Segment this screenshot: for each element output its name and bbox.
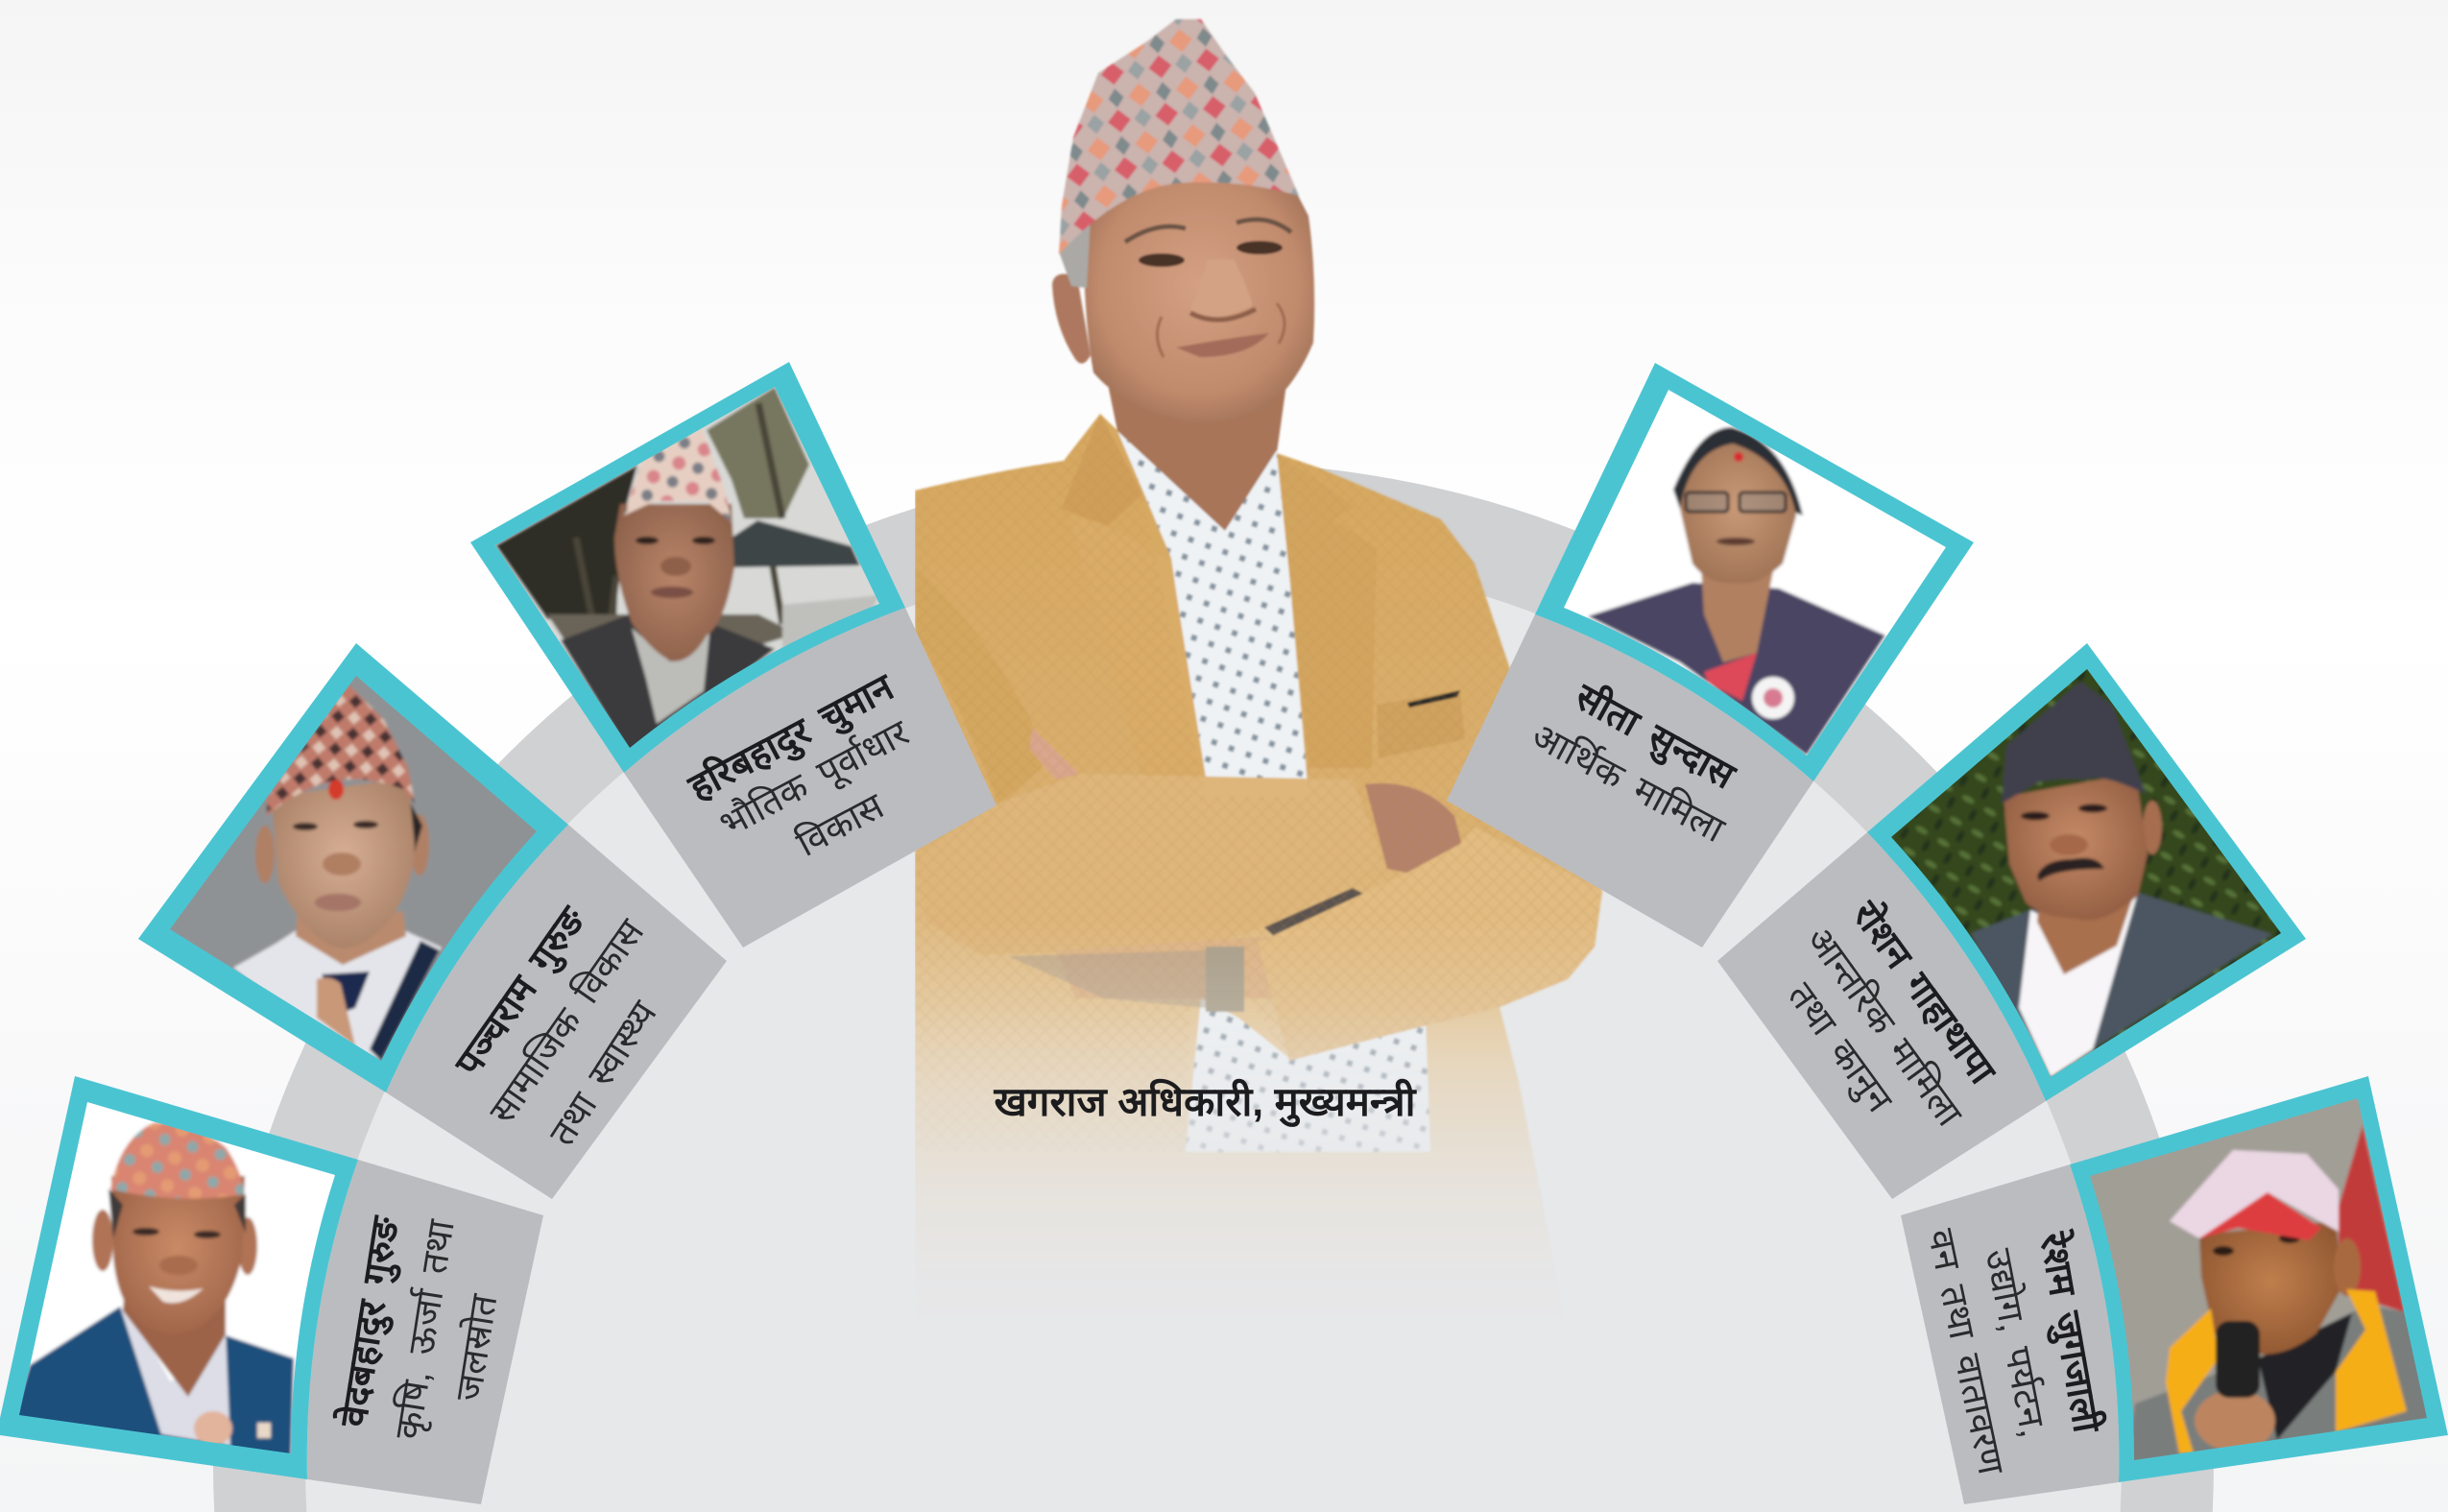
hair [1673,427,1803,516]
portrait 6: रेशम जुगजाली [2074,1085,2443,1469]
forearm under arm [1059,938,1271,998]
name: रोशन गाहाथापा [1843,893,2005,1092]
left trees [495,465,637,619]
mouth [651,587,693,598]
portfolio line 1: सामाजिक विकास [481,911,653,1131]
eyes [2213,1246,2234,1256]
panel: सीता सुन्दास label [1447,614,1813,948]
shirt [2019,893,2138,1077]
right hand [1365,783,1463,876]
neck [2037,888,2136,974]
ear [2334,1238,2361,1296]
watch strap gap [1264,888,1365,939]
jacket [2126,1306,2434,1469]
portfolio line 2: जलस्रोत [447,1290,506,1404]
portfolio line 1: कृषि, ऊर्जा तथा [386,1216,465,1443]
text: रोशन गाहाथापा [1778,893,2005,1135]
portfolio line 1: भौतिक पूर्वाधार [712,710,918,848]
nose [159,1256,198,1275]
tika [2201,1192,2321,1240]
text: सीता सुन्दास [1524,674,1743,852]
photo frame 6 [2070,1076,2448,1482]
panel: रेशम जुगजाली label [1901,1164,2119,1504]
caption: chief minister: खगराज अधिकारी, मुख्यमन्त्री [993,1078,1418,1127]
smile creases [1157,303,1284,357]
shirt [632,625,710,724]
ears [92,1210,113,1271]
eyes [293,823,318,830]
lower shirt [1186,998,1430,1152]
portrait 1: वेदबहादुर गुरुङ [0,1056,384,1488]
eyes [1139,253,1185,267]
mouth [1716,538,1755,545]
neck [1701,566,1774,662]
tie [322,972,370,1013]
garland left [2166,1308,2219,1453]
jacket [10,1307,294,1469]
ears [255,826,275,883]
left collar [1062,414,1142,526]
eyes [132,1228,159,1236]
badge [1752,677,1794,719]
eyebrows [1125,227,1186,242]
cap [2170,1150,2339,1238]
suit [1971,893,2272,1066]
hands [317,977,355,1046]
nose [660,557,691,576]
suit [561,614,775,754]
hand [2195,1390,2275,1452]
trunks [576,403,782,624]
face [272,778,415,948]
face [2199,1221,2342,1355]
portrait 3: हरिबहादुर चुमान [480,374,893,758]
blouse [1704,653,1757,701]
name: पञ्चराम गुरुङ [447,899,597,1086]
portfolio line 1: आन्तरिक मामिला [1798,919,1971,1135]
photo frame 4 [1535,363,1974,781]
sleeve hand tip [1029,728,1079,780]
face [1680,444,1796,584]
portrait 4: सीता सुन्दास [1555,374,1958,768]
jacket weave texture [915,414,1602,1152]
outer grey arc band [213,463,2214,1512]
portfolio line 2: वन तथा वातावरण [1919,1226,2011,1478]
right tree [707,387,809,518]
bindi [1734,452,1743,462]
garland right [2336,1289,2407,1432]
strap [370,941,440,1061]
shirt [233,931,442,1061]
shirt [1117,431,1308,797]
left lapel [1177,608,1207,778]
text: वेदबहादुर गुरुङ [331,1212,506,1443]
pocket square [1407,690,1460,708]
name: वेदबहादुर गुरुङ [331,1212,410,1431]
watch [1206,947,1244,1012]
pocket [1377,690,1465,758]
neck [1108,384,1286,531]
portrait 5: रोशन गाहाथापा [1872,653,2294,1085]
nose shadow [1190,309,1256,320]
photo frame 5 [1867,643,2306,1101]
suit [1588,583,1885,756]
neck [123,1286,226,1397]
panel: वेदबहादुर गुरुङ label [307,1160,543,1504]
inner light disc [305,555,2122,1512]
folded right sleeve [1258,828,1602,1061]
left sleeve seam shadow [916,609,1041,803]
cap [2002,682,2146,804]
shirt [120,1307,230,1446]
cap [1059,19,1299,254]
eyes [2021,812,2050,820]
ear [2143,801,2162,854]
portfolio line 2: तथा स्वास्थ्य [542,994,665,1153]
wall [547,614,797,672]
nose [1190,259,1253,316]
nose [323,852,361,876]
cap [267,684,415,816]
portfolio line 2: विकास [789,783,892,865]
name: सीता सुन्दास [1566,674,1743,801]
face [1084,173,1314,422]
panel: हरिबहादुर चुमान label [624,608,996,948]
eyes [636,537,659,544]
neck [296,912,406,965]
badge center [1764,688,1783,708]
text: हरिबहादुर चुमान [681,664,918,865]
portfolio: आर्थिक मामिला [1524,714,1733,852]
portfolio line 2: तथा कानुन [1778,976,1900,1121]
hair [394,789,422,864]
jacket [915,413,1603,1227]
panel: पञ्चराम गुरुङ label [386,825,727,1199]
shadow under arm [1008,950,1206,1008]
glasses [1686,492,1786,512]
cap [624,428,732,522]
name: रेशम जुगजाली [2028,1227,2109,1438]
photo frame 2 [138,643,568,1092]
lapel pin [257,1423,271,1438]
text: रेशम जुगजाली [1919,1226,2109,1478]
portfolio line 1: उद्योग, पर्यटन, [1977,1245,2055,1441]
chief minister portrait [915,19,1602,1344]
portrait 2: पञ्चराम गुरुङ [144,662,557,1075]
lips [315,894,361,911]
cap [110,1122,245,1198]
face [614,504,734,661]
umbrella [732,520,860,567]
name: हरिबहादुर चुमान [681,664,902,812]
face [111,1176,245,1334]
tika [328,779,344,800]
black collar [2258,1313,2352,1440]
face [2004,773,2148,921]
mouth [1176,333,1269,357]
hair [108,1188,246,1238]
building [782,595,879,653]
ear [1052,274,1091,364]
panel: रोशन गाहाथापा label [1717,832,2046,1199]
right lapel [1277,453,1377,768]
microphone [2216,1321,2260,1398]
smile [149,1286,204,1303]
hand [194,1411,232,1446]
hair [1059,216,1091,288]
photo frame 1 [0,1076,358,1479]
flag [2339,1125,2405,1312]
text: पञ्चराम गुरुङ [447,899,665,1153]
moustache [2037,858,2104,881]
folded left arm [920,774,1384,955]
nose [2050,834,2088,855]
photo frame 3 [470,362,905,773]
